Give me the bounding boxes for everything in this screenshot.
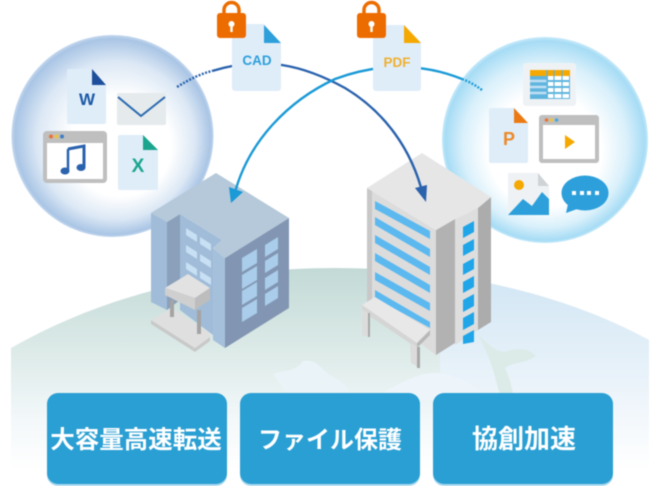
icon: image file (508, 173, 549, 215)
left building right-face windows (242, 237, 278, 322)
icon: PowerPoint document (489, 108, 528, 163)
icon: Word document: W (79, 90, 96, 109)
icon: video window (539, 115, 599, 163)
icon: Excel document: X (132, 156, 145, 177)
button: file protection (240, 393, 420, 486)
icon: music window (43, 131, 107, 183)
button: file protection: ファイル保護 (258, 427, 402, 454)
button: accelerating co-creation (433, 393, 613, 486)
arrow: dark blue curve to right building (177, 63, 427, 202)
icon: CAD document with lock (217, 3, 281, 91)
left building entrance canopy (151, 274, 210, 352)
button: high-speed large file transfer: 大容量高速転送 (50, 426, 222, 454)
icon: envelope (117, 93, 166, 125)
icon: Excel document (118, 135, 158, 190)
right office tower (362, 153, 491, 368)
left office building (151, 173, 289, 352)
icon: Word document (67, 69, 106, 124)
right data sphere (442, 37, 648, 243)
button: accelerating co-creation: 協創加速 (472, 424, 576, 454)
icon: CAD document with lock: CAD (242, 53, 272, 68)
tower side windows (463, 221, 474, 344)
icon: speech bubble (562, 176, 608, 213)
tower entrance canopy (362, 297, 430, 368)
icon: PDF document with lock (357, 3, 421, 91)
left building windows (186, 228, 211, 285)
tower blue stripes (375, 201, 430, 328)
globe (10, 268, 650, 436)
arrow: light blue curve to left building (229, 67, 482, 203)
left data sphere (12, 35, 214, 237)
button: high-speed large file transfer (47, 393, 227, 486)
icon: PowerPoint document: P (503, 129, 515, 149)
icon: spreadsheet table (523, 63, 576, 106)
icon: PDF document with lock: PDF (384, 55, 410, 70)
